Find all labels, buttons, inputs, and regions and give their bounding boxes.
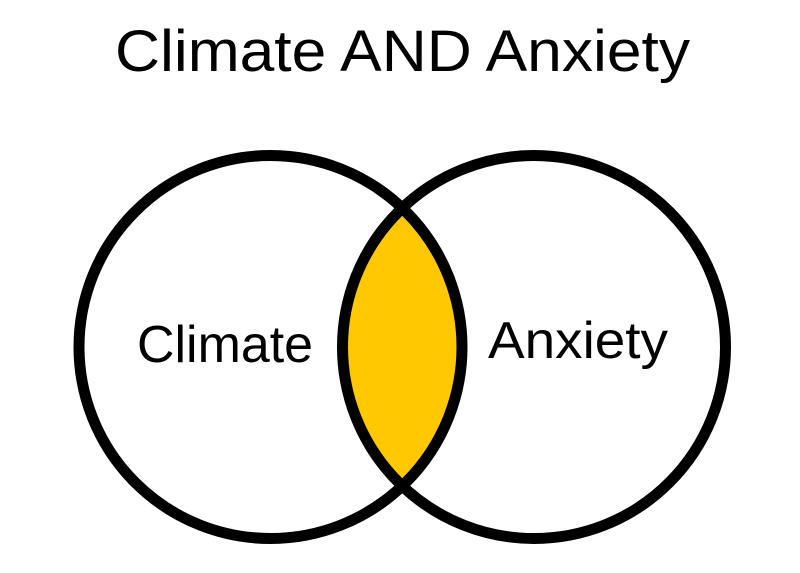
- label: anxiety: Anxiety: [488, 312, 668, 370]
- label: climate: Climate: [137, 316, 313, 374]
- circle: climate: [79, 156, 462, 538]
- circle: anxiety: [342, 156, 726, 538]
- venn overlap: climate and anxiety: [343, 209, 461, 485]
- title: Climate AND Anxiety: [115, 19, 690, 84]
